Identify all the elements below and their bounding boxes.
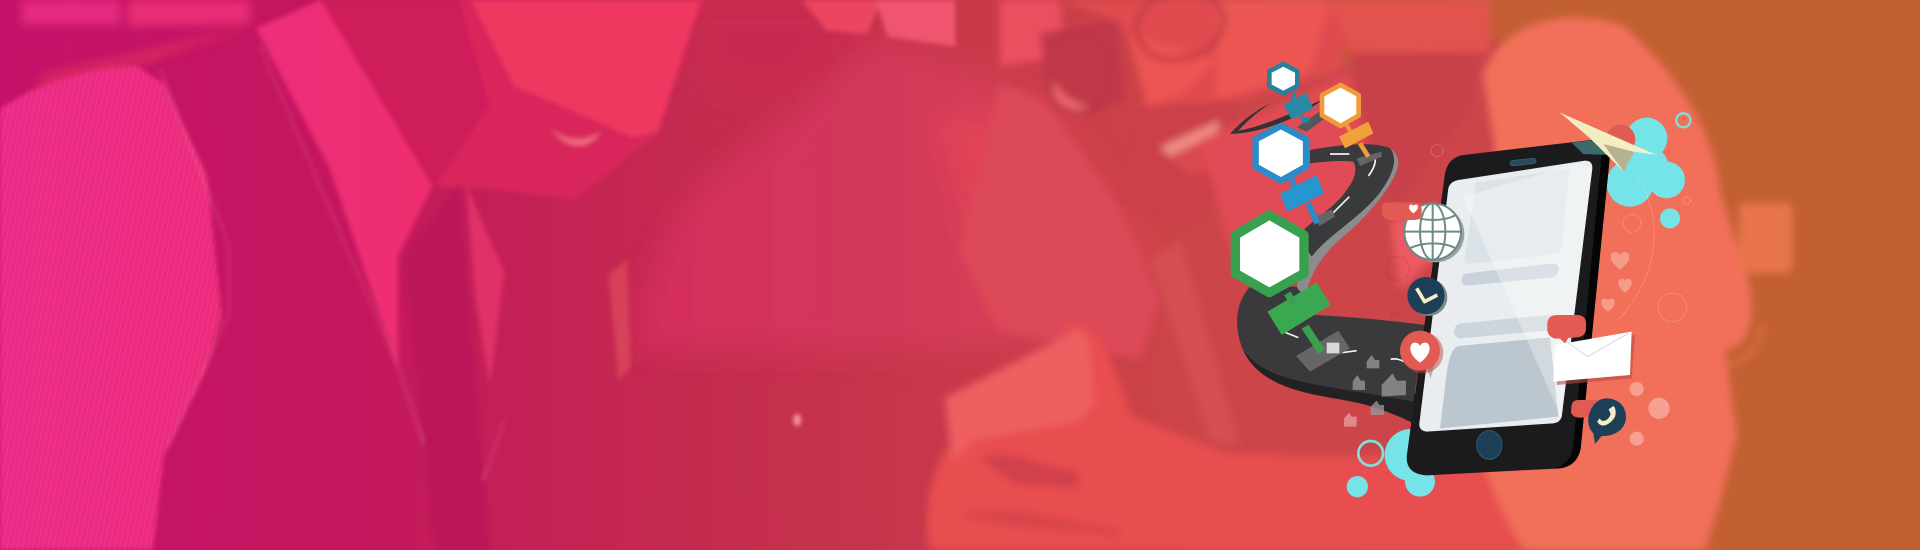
small red heart bubble [1382, 202, 1422, 220]
handset [1597, 406, 1616, 426]
knuckle shadow [960, 510, 1120, 536]
left man collar [256, 0, 432, 256]
centre man shirt highlight [931, 110, 1139, 321]
home button [1477, 431, 1502, 459]
phone right edge [1553, 140, 1610, 469]
centre man head [686, 0, 876, 104]
phone call badge [1571, 398, 1626, 444]
garment light patch [1390, 205, 1440, 290]
road underside grey [1297, 148, 1398, 293]
smartphone [1407, 139, 1610, 475]
screen [1419, 161, 1592, 432]
cyan ring bottom [1358, 441, 1383, 466]
right man shoulder [960, 83, 1160, 360]
left man and foreground [0, 0, 955, 550]
envelope shadow [1557, 335, 1635, 385]
centre man shirt [636, 38, 1149, 350]
neck and shirt, left panel [1200, 73, 1380, 260]
right man teeth [1160, 120, 1220, 157]
second window [129, 0, 250, 26]
screen glare [1463, 163, 1592, 418]
right man forehead [1060, 0, 1350, 107]
road upper curve [1298, 144, 1394, 257]
sleeve fabric stripes [0, 66, 222, 550]
teal hexagon sign [1269, 64, 1313, 123]
phone top corner tint [1572, 139, 1610, 155]
background window [876, 0, 955, 47]
paper plane with red bubble [1560, 113, 1657, 172]
forearm and hand [927, 322, 1540, 550]
right man chin light [1170, 135, 1240, 175]
check badge [1407, 277, 1447, 316]
dotted decorations [1431, 145, 1690, 322]
left man lower shirt strip [329, 168, 398, 367]
green hexagon sign [1235, 215, 1331, 352]
speaker [1510, 158, 1536, 166]
top of right area [1330, 0, 1490, 52]
pale shirt strip near arm [1150, 240, 1240, 445]
faint hearts [1601, 252, 1632, 312]
cyan ring top right [1676, 113, 1690, 127]
ear highlight [1053, 80, 1093, 112]
upper pill [1462, 263, 1559, 286]
tie [404, 184, 490, 550]
chair patch [1739, 203, 1792, 273]
right man beard [1117, 100, 1240, 230]
road lower underside [1238, 333, 1417, 423]
cyan blobs bottom [1347, 429, 1437, 497]
envelope flap [1562, 333, 1628, 357]
road sign markers [1235, 64, 1373, 352]
envelope with red bubble [1547, 315, 1635, 385]
sleeve band [1727, 325, 1762, 365]
globe shadow [1408, 206, 1464, 262]
road signs base plates [1296, 152, 1382, 372]
plane fold [1603, 144, 1633, 172]
road [1230, 99, 1425, 423]
dark garment behind [1350, 53, 1480, 200]
envelope [1553, 332, 1632, 382]
right man, pixel coordinates [927, 0, 1792, 550]
left man smile [551, 129, 600, 146]
vest stitching [160, 45, 504, 550]
dark dotted decorations [1386, 257, 1409, 322]
left man sleeve [0, 66, 222, 550]
road far curve highlight [1297, 111, 1325, 132]
right man side face [1217, 0, 1330, 100]
blue hexagon sign [1256, 126, 1324, 223]
finger shadow [980, 455, 1078, 488]
lane dashes [1283, 154, 1404, 362]
red message bubble [1547, 315, 1586, 343]
first window [22, 0, 120, 24]
small red bubble [1571, 400, 1602, 418]
lower card [1440, 337, 1558, 428]
road far thin curve [1230, 99, 1324, 134]
road lower band [1237, 287, 1425, 402]
left man cheek and nose [471, 0, 700, 137]
dark bubble [1588, 398, 1626, 444]
phone body [1407, 139, 1610, 475]
centre man, soft focus [636, 0, 1149, 350]
orange hexagon sign [1322, 85, 1373, 157]
cyan cloud blobs top right [1607, 118, 1685, 228]
smartphone in photo [945, 330, 1094, 462]
red bubble [1606, 125, 1635, 154]
globe [1404, 203, 1461, 260]
wall behind right man [1200, 40, 1500, 460]
chrome block [1327, 343, 1339, 353]
right man salmon shirt [1475, 18, 1752, 550]
pendant [609, 260, 631, 380]
heart badge [1400, 331, 1443, 378]
lower pill [1454, 315, 1567, 338]
left man face [435, 0, 704, 200]
faint speech dots [1630, 382, 1670, 446]
plane body [1560, 113, 1657, 155]
upper card [1465, 168, 1569, 264]
windows at top left [12, 0, 252, 122]
globe icon [1404, 203, 1464, 262]
right man cheek [1130, 35, 1217, 107]
left man shirt right of tie [467, 186, 504, 386]
centre man cheek [802, 0, 882, 34]
faint thumbs up icons [1344, 355, 1406, 427]
dark hair at ear [1040, 20, 1125, 115]
plane wing [1560, 113, 1633, 172]
shoulder seam [12, 26, 252, 122]
pocket dot [793, 414, 801, 426]
top left cloth [1000, 0, 1063, 67]
illustration: smartphone with road and social icons [1230, 64, 1690, 497]
glasses [1046, 0, 1231, 112]
left man hair [321, 0, 490, 186]
